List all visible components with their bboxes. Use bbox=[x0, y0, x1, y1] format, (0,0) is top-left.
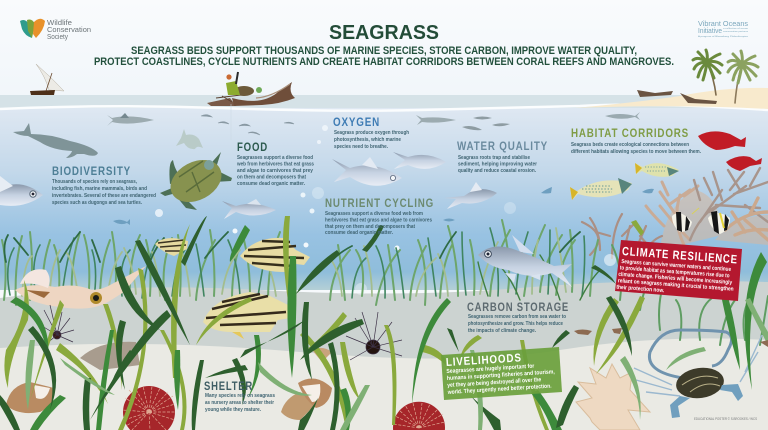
panel: livelihoods: humans in supporting fisheries and tourism, bbox=[447, 369, 555, 382]
logo: Vibrant Oceans Initiative: a collective of ocean bbox=[723, 27, 748, 30]
striped sweetlips fish bbox=[155, 238, 310, 339]
small fish shoal bbox=[201, 115, 294, 135]
text: food bbox=[236, 140, 314, 187]
panel: climate resilience: climate change. Fisheries will become increasingly bbox=[618, 272, 733, 286]
text: oxygen: Seagrass produce oxygen through bbox=[334, 130, 409, 136]
panel: livelihoods: yet they are being destroyed all over the bbox=[447, 377, 542, 389]
olive blades bbox=[4, 216, 645, 430]
moorish idol fish bbox=[672, 208, 730, 234]
light blades bbox=[25, 298, 768, 430]
red grouper large bbox=[698, 131, 746, 150]
panel: climate resilience bbox=[615, 240, 742, 301]
text: biodiversity: invertebrates. Several of these are endangered bbox=[52, 193, 156, 199]
logo: Wildlife Conservation Society: Conservation bbox=[47, 27, 91, 34]
sailing dhow bbox=[30, 64, 64, 95]
text: nutrient cycling: that prey on them and decomposers that bbox=[325, 224, 415, 230]
heading: climate resilience: CLIMATE RESILIENCE bbox=[622, 244, 738, 266]
blue swimming crab bbox=[634, 330, 762, 418]
text: carbon storage: the impacts of climate change. bbox=[468, 328, 536, 334]
spiny conch shell bbox=[576, 364, 650, 430]
heading: oxygen: OXYGEN bbox=[333, 115, 380, 129]
text: oxygen: species need to breathe. bbox=[334, 144, 388, 150]
text: carbon storage bbox=[467, 300, 569, 334]
panel: climate resilience: their protection now. bbox=[616, 285, 665, 294]
panel: livelihoods: world. They urgently need better protection. bbox=[447, 384, 552, 396]
text: nutrient cycling bbox=[325, 196, 434, 236]
text: water quality: sediment, helping improving water bbox=[458, 162, 538, 168]
cuttlefish bbox=[15, 266, 146, 309]
text: nutrient cycling: Seagrasses support a diverse food web from bbox=[325, 211, 423, 217]
text: water quality: Seagrass roots trap and stabilise bbox=[458, 155, 530, 161]
heading: water quality: WATER QUALITY bbox=[457, 139, 548, 153]
heading: nutrient cycling: NUTRIENT CYCLING bbox=[325, 196, 434, 210]
heading: biodiversity: BIODIVERSITY bbox=[52, 164, 131, 178]
text: shelter bbox=[204, 379, 275, 413]
silver fish centre bbox=[393, 152, 446, 169]
heading: carbon storage: CARBON STORAGE bbox=[467, 300, 569, 314]
text: biodiversity: Thousands of species rely on seagrass, bbox=[52, 179, 137, 185]
logo: Wildlife Conservation Society: Society bbox=[47, 34, 68, 41]
text: biodiversity bbox=[52, 164, 156, 206]
bubbles bbox=[155, 125, 616, 295]
logo: Vibrant Oceans Initiative: A program of Bloomberg Philanthropies bbox=[698, 35, 748, 38]
panel: climate resilience: reliant on seagrass making it crucial to strengthen bbox=[618, 278, 734, 293]
text: oxygen bbox=[333, 115, 409, 150]
WCS mark bbox=[20, 19, 45, 38]
sand shells bbox=[6, 342, 332, 420]
beach bbox=[575, 88, 768, 109]
heading: shelter: SHELTER bbox=[204, 379, 253, 393]
coral reef bbox=[582, 168, 768, 258]
text: habitat corridors: Seagrass beds create ecological connections between bbox=[571, 142, 689, 148]
title: SEAGRASS bbox=[329, 21, 439, 44]
text: food: and algae to carnivores that prey bbox=[237, 168, 314, 174]
subtitle bbox=[94, 45, 674, 68]
heading: livelihoods: LIVELIHOODS bbox=[446, 352, 522, 369]
text: shelter: young while they mature. bbox=[205, 407, 261, 413]
text: biodiversity: species such as dugongs and sea turtles. bbox=[52, 200, 142, 206]
silver fish left edge bbox=[0, 176, 43, 206]
silver fish water quality bbox=[444, 182, 497, 209]
logo: Vibrant Oceans Initiative: conservation partners bbox=[723, 30, 748, 33]
dark sea urchins bbox=[42, 305, 402, 360]
pale turtle bbox=[176, 129, 203, 149]
text: oxygen: photosynthesis, which marine bbox=[334, 137, 401, 143]
red grouper small bbox=[726, 156, 762, 171]
barracuda right bbox=[605, 112, 640, 120]
small shrimp bbox=[574, 328, 768, 347]
credit line: EDUCATIONAL POSTER © S.BROOKES / WCS bbox=[694, 417, 757, 421]
marine life in open water bbox=[0, 112, 762, 225]
text: shelter: Many species rely on seagrass bbox=[205, 393, 275, 399]
foreground seagrass blades bbox=[0, 216, 768, 430]
text: nutrient cycling: herbivores that eat grass and algae to carnivores bbox=[325, 218, 432, 224]
large silver fish bbox=[478, 235, 572, 287]
silver fish oxygen bbox=[332, 157, 402, 186]
silver fish food bbox=[222, 199, 276, 219]
text: food: consume dead organic matter. bbox=[237, 181, 305, 187]
green turtle bbox=[160, 152, 232, 210]
text: nutrient cycling: consume dead organic matter. bbox=[325, 230, 393, 236]
spotted sweetlips large bbox=[570, 178, 632, 200]
text: shelter: as nursery areas to shelter their bbox=[205, 400, 275, 406]
fishing canoe with fisher bbox=[207, 72, 295, 140]
text: food: Seagrasses support a diverse food bbox=[237, 155, 313, 161]
background seagrass meadow bbox=[2, 220, 768, 345]
beached boats bbox=[637, 90, 717, 104]
subtitle: PROTECT COASTLINES, CYCLE NUTRIENTS AND CREATE HABITAT CORRIDORS BETWEEN CORAL REEFS AND MANGROVES. bbox=[94, 56, 674, 68]
logo: Wildlife Conservation Society: Wildlife bbox=[47, 20, 72, 27]
red sea urchins bbox=[122, 386, 445, 430]
text: food: web from herbivores that eat grass bbox=[236, 162, 314, 168]
logo: Wildlife Conservation Society bbox=[20, 19, 91, 41]
text: food: on them and decomposers that bbox=[237, 174, 306, 180]
palm trees bbox=[693, 50, 758, 103]
spotted sweetlips small bbox=[635, 163, 679, 177]
subtitle: SEAGRASS BEDS SUPPORT THOUSANDS OF MARINE SPECIES, STORE CARBON, IMPROVE WATER QUALITY, bbox=[131, 45, 637, 57]
text: carbon storage: Seagrasses remove carbon from sea water to bbox=[468, 314, 566, 320]
dark blades bbox=[0, 216, 632, 430]
mid green blades bbox=[10, 225, 767, 430]
barracuda left bbox=[107, 113, 154, 126]
small blue fish bbox=[113, 187, 654, 225]
panel: livelihoods: Seagrasses are hugely important for bbox=[446, 364, 535, 375]
text: habitat corridors bbox=[571, 126, 701, 155]
text: water quality: quality and reduce coastal erosion. bbox=[458, 168, 536, 174]
heading: food: FOOD bbox=[237, 140, 268, 154]
logo: Vibrant Oceans Initiative: Initiative bbox=[698, 28, 722, 35]
small barracuda trio bbox=[462, 116, 510, 130]
heading: habitat corridors: HABITAT CORRIDORS bbox=[571, 126, 689, 140]
barracuda centre bbox=[416, 115, 456, 125]
panel: climate resilience: Seagrass can survive warmer waters and continue bbox=[621, 259, 732, 273]
logo: Vibrant Oceans Initiative: Vibrant Oceans bbox=[698, 21, 749, 28]
text: water quality bbox=[457, 139, 548, 174]
text: carbon storage: photosynthesize and grow. This helps reduce bbox=[468, 321, 563, 327]
panel: livelihoods bbox=[441, 347, 562, 400]
logo: Vibrant Oceans Initiative bbox=[698, 21, 749, 38]
panel: climate resilience: to provide habitat as sea temperatures rise due to bbox=[620, 265, 730, 279]
text: habitat corridors: different habitats allowing species to move between them. bbox=[571, 149, 701, 155]
dugong bbox=[13, 123, 98, 158]
text: biodiversity: including fish, marine mammals, birds and bbox=[52, 186, 147, 192]
